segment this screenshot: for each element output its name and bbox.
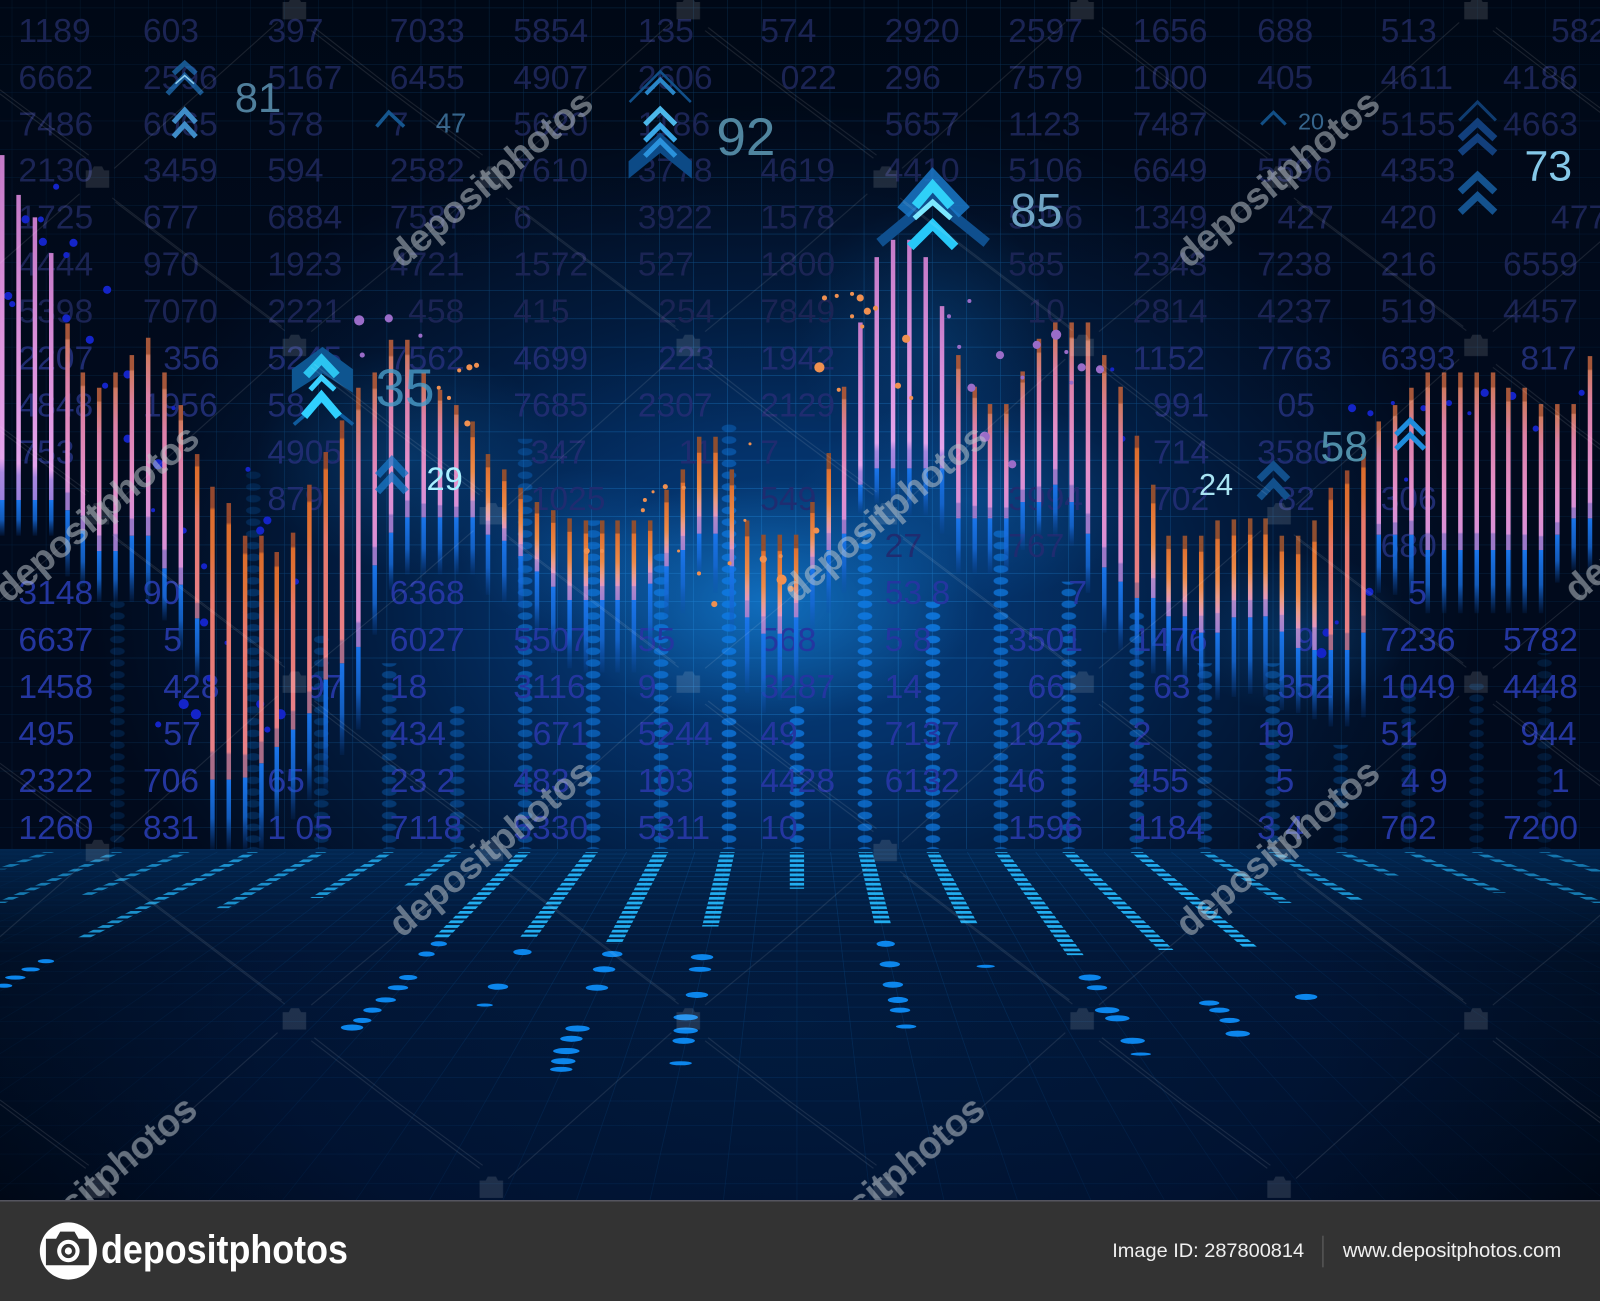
- icon: chevrons near 58: [1396, 420, 1424, 449]
- logo wordmark: depositphotos: [101, 1228, 348, 1272]
- numbers: upper rows: 4619: [760, 153, 835, 190]
- value label: 81: 81: [235, 74, 281, 121]
- icon: chevrons near 35: [292, 347, 353, 424]
- icon: chevrons near 81: [167, 63, 202, 137]
- numbers: upper rows: 2606: [638, 60, 713, 97]
- numbers: lower rows: 3 4: [1257, 810, 1304, 847]
- numbers: lower rows: [18, 575, 1578, 847]
- numbers: upper rows: 5155: [1381, 107, 1455, 144]
- numbers: middle rows: 11: [679, 434, 714, 471]
- numbers: upper rows: 5854: [513, 13, 588, 50]
- watermark text: depositphotos: [774, 416, 994, 610]
- footer divider: [1322, 1236, 1323, 1267]
- numbers: middle rows: 549: [760, 481, 816, 518]
- numbers: upper rows: 420: [1381, 200, 1437, 237]
- numbers: middle rows: 817: [1520, 340, 1577, 377]
- numbers: lower rows: 1596: [1008, 810, 1083, 847]
- numbers: middle rows: 767: [1008, 528, 1064, 565]
- numbers: lower rows: 1476: [1133, 622, 1208, 659]
- numbers: upper rows: 5056: [1008, 200, 1083, 237]
- numbers: middle rows: 2129: [760, 387, 835, 424]
- numbers: upper rows: 4237: [1257, 293, 1332, 330]
- numbers: lower rows: 671: [533, 716, 589, 753]
- numbers: upper rows: 519: [1381, 293, 1437, 330]
- numbers: lower rows: 1 05: [267, 810, 333, 847]
- numbers: upper rows: 1923: [267, 247, 342, 284]
- numbers: middle rows: 223: [658, 340, 714, 377]
- numbers: upper rows: 513: [1381, 13, 1437, 50]
- bar chart: blue lower segments: [0, 468, 1592, 850]
- numbers: middle rows: 7: [760, 434, 779, 471]
- value label: 58: 58: [1320, 423, 1368, 471]
- icon: chevron near 29: [378, 460, 406, 492]
- website url: www.depositphotos.com: [1342, 1240, 1561, 1262]
- numbers: upper rows: [18, 13, 1600, 330]
- numbers: upper rows: 574: [760, 13, 816, 50]
- numbers: upper rows: 6884: [267, 200, 342, 237]
- numbers: middle rows: 306: [1381, 481, 1437, 518]
- numbers: upper rows: 1349: [1133, 200, 1208, 237]
- numbers: upper rows: 3922: [638, 200, 713, 237]
- numbers: upper rows: 1578: [760, 200, 835, 237]
- numbers: lower rows: 97: [306, 669, 344, 706]
- numbers: lower rows: 568: [760, 622, 816, 659]
- numbers: upper rows: 677: [143, 200, 199, 237]
- numbers: upper rows: 1186: [638, 107, 710, 144]
- numbers: middle rows: 680: [1381, 528, 1437, 565]
- value label: 47: 47: [436, 108, 466, 139]
- numbers: upper rows: 135: [638, 13, 694, 50]
- numbers: upper rows: 3778: [638, 153, 713, 190]
- numbers: lower rows: 483: [513, 763, 569, 800]
- numbers: upper rows: 397: [267, 13, 324, 50]
- numbers: lower rows: 10: [760, 810, 798, 847]
- watermark text: depositphotos: [772, 1087, 992, 1282]
- numbers: middle rows: 991: [1153, 387, 1209, 424]
- numbers: upper rows: 1189: [18, 13, 91, 50]
- numbers: lower rows: 7118: [390, 810, 462, 847]
- image id: Image ID: 287800814: [1112, 1240, 1304, 1262]
- numbers: lower rows: 1260: [18, 810, 93, 847]
- numbers: middle rows: 879: [267, 481, 324, 518]
- numbers: middle rows: [18, 340, 1577, 565]
- icon: chevrons near 73: [1459, 102, 1496, 212]
- numbers: lower rows: 6027: [390, 622, 465, 659]
- numbers: lower rows: 428: [163, 669, 219, 706]
- numbers: middle rows: 7685: [513, 387, 588, 424]
- numbers: upper rows: 5657: [885, 107, 960, 144]
- numbers: upper rows: 4444: [18, 247, 93, 284]
- numbers: upper rows: 7579: [1008, 60, 1083, 97]
- value label: 92: 92: [716, 108, 775, 167]
- numbers: upper rows: 458: [408, 293, 464, 330]
- numbers: upper rows: 7610: [513, 153, 588, 190]
- numbers: middle rows: 58: [267, 387, 305, 424]
- numbers: lower rows: 3116: [513, 669, 586, 706]
- numbers: middle rows: 6393: [1381, 340, 1455, 377]
- numbers: lower rows: 2: [1133, 716, 1151, 753]
- background: [0, 0, 1600, 857]
- numbers: upper rows: 7033: [390, 13, 465, 50]
- numbers: middle rows: 3580: [1257, 434, 1332, 471]
- footer bar: [0, 1200, 1600, 1301]
- numbers: lower rows: 1184: [1133, 810, 1205, 847]
- value label: 24: 24: [1199, 468, 1233, 502]
- numbers: upper rows: 5620: [513, 107, 588, 144]
- numbers: lower rows: 2322: [18, 763, 93, 800]
- numbers: lower rows: 18: [390, 669, 427, 706]
- value label: 20: 20: [1298, 109, 1324, 135]
- numbers: middle rows: 714: [1153, 434, 1209, 471]
- icon: chevron near 47: [377, 112, 404, 127]
- numbers: middle rows: 82: [1278, 481, 1315, 518]
- numbers: lower rows: 1925: [1008, 716, 1083, 753]
- numbers: upper rows: 2221: [267, 293, 342, 330]
- watermark text: depositphotos: [1167, 751, 1387, 945]
- numbers: upper rows: 254: [658, 293, 714, 330]
- value label: 35: 35: [376, 359, 435, 418]
- numbers: upper rows: 5167: [267, 60, 342, 97]
- numbers: upper rows: 6649: [1133, 153, 1208, 190]
- numbers: lower rows: 1049: [1381, 669, 1455, 706]
- numbers: lower rows: 944: [1520, 716, 1577, 753]
- floor streaks: [0, 852, 1600, 955]
- numbers: middle rows: 05: [1278, 387, 1315, 424]
- numbers: upper rows: 2343: [1133, 247, 1208, 284]
- numbers: upper rows: 6065: [143, 107, 218, 144]
- value label: 29: 29: [427, 460, 463, 497]
- numbers: upper rows: 578: [267, 107, 324, 144]
- numbers: lower rows: 19: [1257, 716, 1295, 753]
- numbers: lower rows: 3501: [1008, 622, 1083, 659]
- numbers: lower rows: 455: [1133, 763, 1189, 800]
- numbers: upper rows: 7587: [390, 200, 465, 237]
- numbers: lower rows: 53 8: [885, 575, 950, 612]
- icon: chevrons near 24: [1259, 465, 1288, 498]
- numbers: upper rows: 7849: [760, 293, 835, 330]
- blue particles: [4, 184, 1585, 733]
- numbers: lower rows: 5782: [1503, 622, 1578, 659]
- numbers: lower rows: 4 9: [1401, 763, 1448, 800]
- numbers: lower rows: 49: [760, 716, 798, 753]
- numbers: upper rows: 3459: [143, 153, 218, 190]
- numbers: upper rows: 415: [513, 293, 569, 330]
- numbers: lower rows: 7137: [885, 716, 960, 753]
- numbers: upper rows: 216: [1381, 247, 1437, 284]
- floor blobs: [0, 941, 1317, 1072]
- numbers: upper rows: 594: [267, 153, 324, 190]
- numbers: lower rows: 6637: [18, 622, 93, 659]
- numbers: lower rows: 63: [1153, 669, 1190, 706]
- icon: chevron near 20: [1261, 112, 1286, 124]
- numbers: upper rows: 7487: [1133, 107, 1208, 144]
- numbers: lower rows: 1458: [18, 669, 93, 706]
- numbers: upper rows: 5106: [1008, 153, 1083, 190]
- numbers: middle rows: 4905: [267, 434, 342, 471]
- numbers: lower rows: 9: [638, 669, 656, 706]
- floor: [0, 849, 1600, 1201]
- numbers: lower rows: 706: [143, 763, 199, 800]
- numbers: lower rows: 352: [1278, 669, 1334, 706]
- numbers: lower rows: 65: [267, 763, 305, 800]
- numbers: upper rows: 5596: [1257, 153, 1332, 190]
- numbers: upper rows: 4457: [1503, 293, 1578, 330]
- numbers: upper rows: 5398: [18, 293, 93, 330]
- numbers: middle rows: 753: [18, 434, 75, 471]
- numbers: upper rows: 1123: [1008, 107, 1081, 144]
- numbers: middle rows: 1956: [143, 387, 218, 424]
- numbers: upper rows: 4907: [513, 60, 588, 97]
- numbers: lower rows: 831: [143, 810, 199, 847]
- watermark text: depositphotos: [1167, 81, 1387, 276]
- numbers: lower rows: 4428: [760, 763, 835, 800]
- watermark text: depositphotos: [380, 751, 600, 945]
- numbers: lower rows: 9: [1296, 622, 1315, 659]
- bar chart: coloured upper segments: [0, 155, 1592, 780]
- numbers: lower rows: 5: [163, 622, 182, 659]
- numbers: upper rows: 2130: [18, 153, 93, 190]
- numbers: upper rows: 7070: [143, 293, 218, 330]
- numbers: lower rows: 5: [1276, 763, 1294, 800]
- numbers: lower rows: 5244: [638, 716, 713, 753]
- numbers: lower rows: 5507: [513, 622, 588, 659]
- numbers: upper rows: 4353: [1381, 153, 1455, 190]
- numbers: upper rows: 7486: [18, 107, 93, 144]
- numbers: upper rows: 2597: [1008, 13, 1083, 50]
- numbers: middle rows: 7763: [1257, 340, 1332, 377]
- numbers: upper rows: 2596: [143, 60, 218, 97]
- numbers: lower rows: 7200: [1503, 810, 1578, 847]
- numbers: upper rows: 4611: [1381, 60, 1453, 97]
- numbers: lower rows: 5311: [638, 810, 710, 847]
- numbers: upper rows: 1572: [513, 247, 588, 284]
- numbers: upper rows: 688: [1257, 13, 1313, 50]
- numbers: middle rows: 1152: [1133, 340, 1205, 377]
- numbers: upper rows: 1800: [760, 247, 835, 284]
- numbers: upper rows: 4410: [885, 153, 960, 190]
- numbers: lower rows: 495: [18, 716, 75, 753]
- numbers: upper rows: 2920: [885, 13, 960, 50]
- numbers: upper rows: 585: [1008, 247, 1064, 284]
- numbers: upper rows: 1656: [1133, 13, 1208, 50]
- numbers: lower rows: 55: [638, 622, 675, 659]
- numbers: middle rows: 1942: [760, 340, 835, 377]
- numbers: lower rows: 6368: [390, 575, 465, 612]
- numbers: lower rows: 6132: [885, 763, 960, 800]
- numbers: upper rows: 7238: [1257, 247, 1332, 284]
- numbers: lower rows: 90: [143, 575, 180, 612]
- numbers: upper rows: 6: [513, 200, 532, 237]
- numbers: lower rows: 46: [1008, 763, 1046, 800]
- numbers: lower rows: 57: [163, 716, 201, 753]
- numbers: middle rows: 1025: [531, 481, 605, 518]
- numbers: lower rows: 14: [885, 669, 922, 706]
- numbers: upper rows: 4186: [1503, 60, 1578, 97]
- numbers: lower rows: 5330: [513, 810, 588, 847]
- value label: 73: 73: [1524, 143, 1572, 191]
- icon: chevrons near 92: [629, 71, 692, 179]
- numbers: upper rows: 296: [885, 60, 941, 97]
- numbers: middle rows: 27: [885, 528, 922, 565]
- numbers: middle rows: 5245: [267, 340, 342, 377]
- numbers: upper rows: 405: [1257, 60, 1313, 97]
- numbers: upper rows: 4663: [1503, 107, 1578, 144]
- value label: 85: 85: [1010, 185, 1062, 237]
- numbers: middle rows: 702: [1153, 481, 1209, 518]
- dotted vertical columns: [109, 423, 1553, 849]
- numbers: upper rows: 1000: [1133, 60, 1208, 97]
- numbers: middle rows: 3994: [1008, 481, 1083, 518]
- numbers: upper rows: 527: [638, 247, 694, 284]
- numbers: lower rows: 3287: [760, 669, 835, 706]
- numbers: lower rows: 1: [1551, 763, 1570, 800]
- numbers: lower rows: 51: [1381, 716, 1418, 753]
- numbers: upper rows: 6662: [18, 60, 93, 97]
- watermark text: depositphotos: [380, 81, 600, 276]
- orange particles: [437, 292, 913, 607]
- numbers: upper rows: 2582: [390, 153, 465, 190]
- numbers: middle rows: 7562: [390, 340, 465, 377]
- numbers: upper rows: 427: [1278, 200, 1334, 237]
- numbers: lower rows: 23 2: [390, 763, 455, 800]
- numbers: lower rows: 4448: [1503, 669, 1578, 706]
- purple particles: [354, 299, 1104, 468]
- icon: chevrons near 85: [880, 179, 987, 247]
- numbers: upper rows: 6455: [390, 60, 465, 97]
- numbers: upper rows: 603: [143, 13, 199, 50]
- numbers: lower rows: 7: [1068, 575, 1087, 612]
- numbers: lower rows: 7236: [1381, 622, 1455, 659]
- numbers: lower rows: 103: [638, 763, 694, 800]
- numbers: middle rows: 2307: [638, 387, 713, 424]
- numbers: lower rows: 66: [1028, 669, 1065, 706]
- numbers: middle rows: 2207: [18, 340, 93, 377]
- numbers: lower rows: 3148: [18, 575, 93, 612]
- numbers: upper rows: 1725: [18, 200, 93, 237]
- numbers: middle rows: 356: [163, 340, 219, 377]
- numbers: lower rows: 434: [390, 716, 446, 753]
- numbers: lower rows: 702: [1381, 810, 1437, 847]
- numbers: upper rows: 7: [390, 107, 409, 144]
- numbers: middle rows: 4699: [513, 340, 588, 377]
- numbers: lower rows: 5: [1408, 575, 1427, 612]
- numbers: upper rows: 970: [143, 247, 199, 284]
- numbers: upper rows: 4721: [390, 247, 465, 284]
- numbers: middle rows: 4848: [18, 387, 93, 424]
- numbers: lower rows: 5 8: [885, 622, 931, 659]
- numbers: upper rows: 10: [1028, 293, 1065, 330]
- numbers: upper rows: 6559: [1503, 247, 1578, 284]
- numbers: upper rows: 022: [781, 60, 837, 97]
- numbers: middle rows: 347: [531, 434, 587, 471]
- numbers: upper rows: 2814: [1133, 293, 1208, 330]
- background number matrix: [18, 13, 1600, 847]
- icon: depositphotos logo camera: [40, 1222, 97, 1280]
